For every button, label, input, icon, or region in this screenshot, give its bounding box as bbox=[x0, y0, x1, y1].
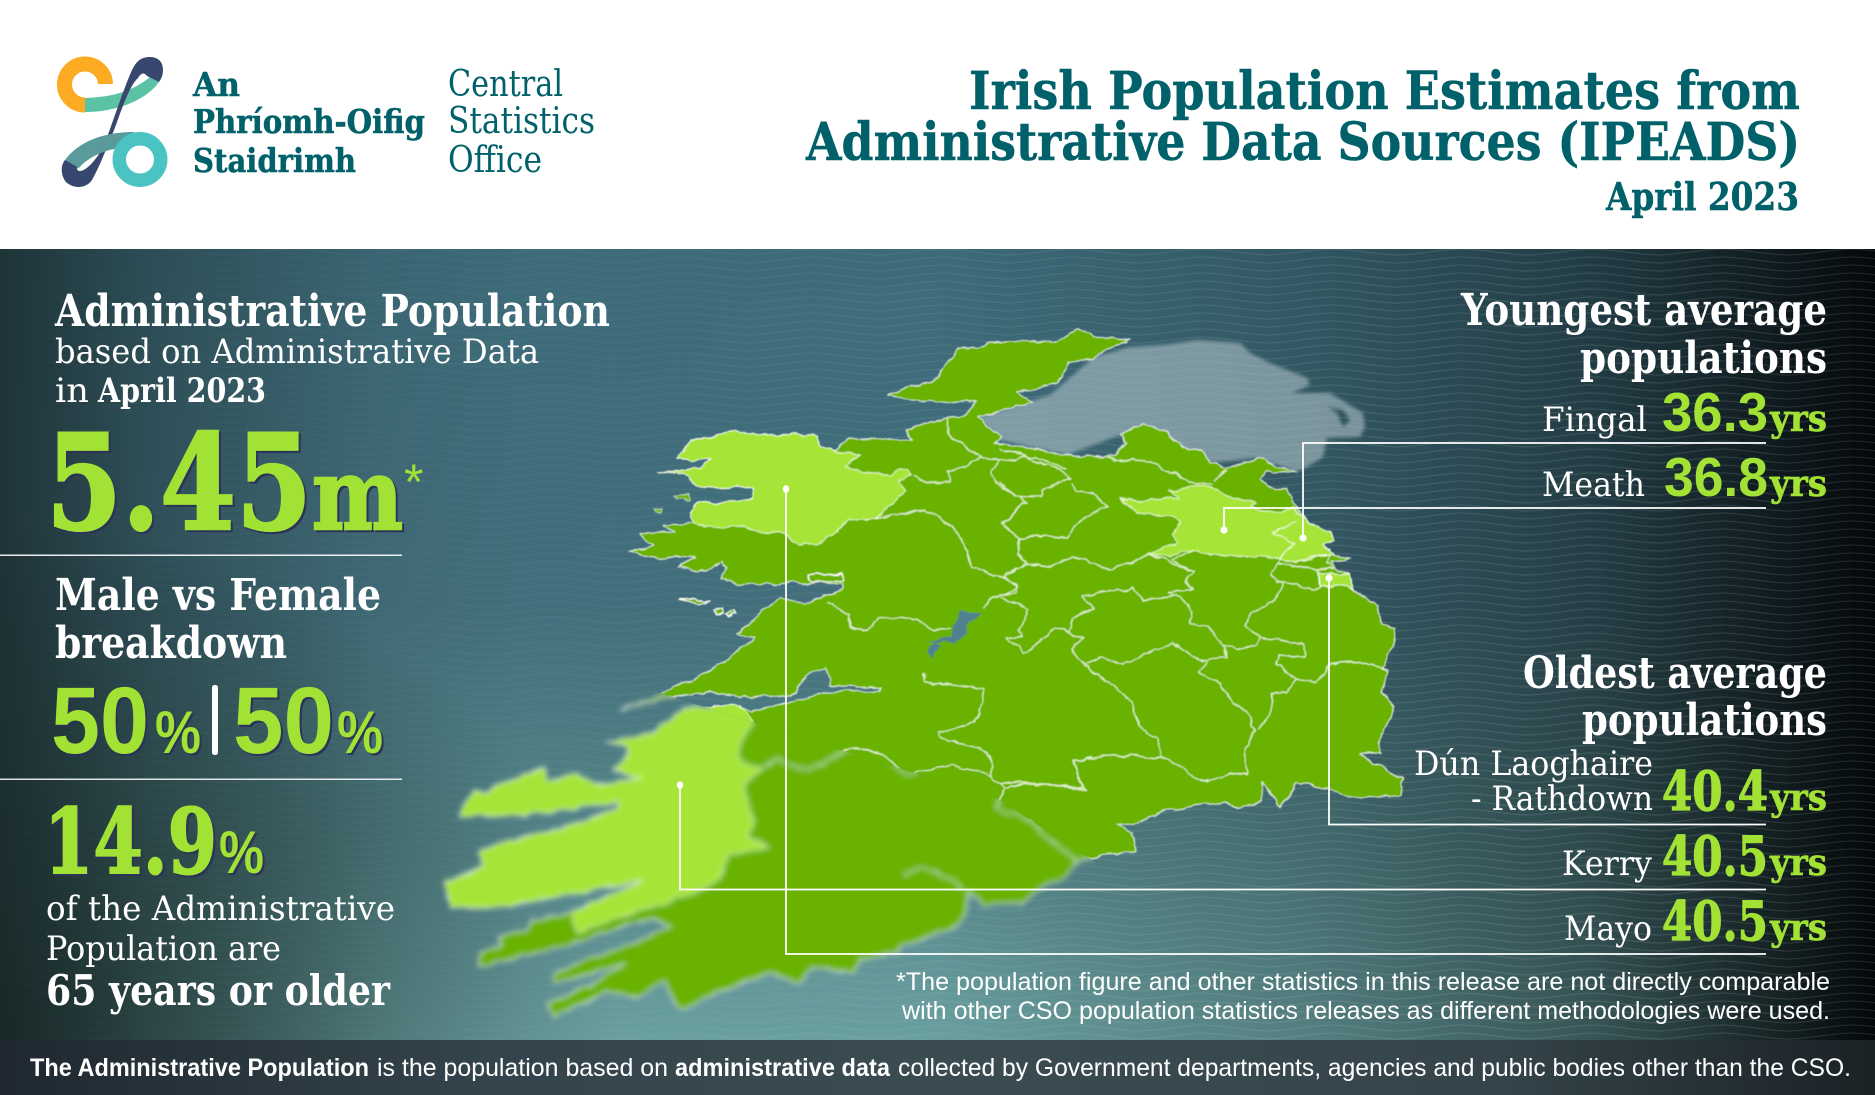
subheading bbox=[55, 332, 539, 411]
row: Mayo: 40.5 bbox=[1662, 889, 1768, 953]
description: Population are bbox=[46, 929, 281, 969]
row: Kerry: yrs bbox=[1769, 842, 1827, 884]
row: Dún Laoghaire-Rathdown bbox=[1414, 744, 1827, 823]
row: Mayo bbox=[1564, 889, 1827, 953]
percentages: 50 bbox=[51, 668, 149, 774]
logo text: English: Central bbox=[448, 64, 563, 105]
row: Meath: yrs bbox=[1769, 463, 1827, 505]
percentages bbox=[51, 668, 383, 774]
row: Meath: 36.8 bbox=[1664, 446, 1768, 508]
subheading: based on Administrative Data bbox=[55, 332, 539, 372]
subheading: in bbox=[55, 371, 89, 411]
footer definition text: collected by Government departments, agencies and public bodies other than the CSO. bbox=[898, 1054, 1851, 1082]
heading bbox=[1460, 285, 1827, 384]
heading: Male vs Female bbox=[55, 570, 381, 621]
panel: footer band background bbox=[0, 1040, 1875, 1095]
big number 5.45m: m bbox=[312, 438, 403, 553]
logo text: Irish bbox=[192, 65, 425, 180]
icon: CSO logo mark bbox=[62, 57, 163, 187]
row: Meath: Meath bbox=[1542, 465, 1645, 505]
logo text: Irish: An bbox=[192, 65, 240, 104]
row: Mayo: Mayo bbox=[1564, 909, 1652, 949]
panel: youngest populations bbox=[1460, 285, 1827, 508]
row: Fingal: Fingal bbox=[1542, 400, 1647, 440]
logo text: English: Office bbox=[448, 140, 542, 181]
title bbox=[805, 61, 1800, 219]
row: Kerry: 40.5 bbox=[1662, 824, 1768, 888]
heading: populations bbox=[1582, 695, 1827, 746]
row: Fingal: yrs bbox=[1769, 398, 1827, 440]
wave line texture bbox=[518, 249, 1875, 1040]
percentages: 50 bbox=[233, 668, 334, 774]
callout: Dún Laoghaire-Rathdown leader line bbox=[1325, 574, 1766, 824]
big number 14.9%: % bbox=[219, 819, 264, 886]
panel: male vs female bbox=[51, 570, 383, 774]
panel: oldest populations bbox=[1414, 648, 1827, 953]
footer definition text: The Administrative Population bbox=[30, 1054, 369, 1082]
callout: Mayo leader line bbox=[783, 485, 1766, 954]
map: Northern Ireland (greyed out) bbox=[978, 340, 1365, 472]
callout: Kerry leader line bbox=[677, 781, 1766, 890]
row: Dún Laoghaire-Rathdown: 40.4 bbox=[1662, 759, 1768, 823]
callout: Fingal leader line bbox=[1299, 443, 1766, 542]
panel: gradient map background bbox=[0, 249, 1875, 1040]
logo text: English: Statistics bbox=[448, 101, 595, 142]
footer definition text bbox=[30, 1054, 1851, 1082]
big number 14.9%: 14.9 bbox=[44, 789, 217, 895]
percentages: % bbox=[155, 699, 201, 766]
row: Dún Laoghaire-Rathdown: - Rathdown bbox=[1471, 779, 1653, 819]
footer definition text: is the population based on bbox=[377, 1054, 668, 1082]
separator bbox=[212, 685, 218, 755]
heading: breakdown bbox=[55, 618, 287, 669]
divider bbox=[0, 778, 402, 780]
divider bbox=[0, 554, 402, 556]
row: Meath bbox=[1542, 446, 1827, 508]
footnote: *The population figure and other statistics in this release are not directly comparable bbox=[896, 968, 1830, 996]
heading bbox=[55, 570, 381, 669]
row: Kerry: Kerry bbox=[1562, 844, 1653, 884]
map: Republic of Ireland counties bbox=[445, 330, 1402, 1017]
percentages: % bbox=[337, 699, 383, 766]
subheading: April 2023 bbox=[97, 371, 266, 411]
title: April 2023 bbox=[1605, 174, 1799, 219]
heading: populations bbox=[1580, 333, 1827, 384]
panel: 65 years or older bbox=[44, 789, 395, 1015]
description: 65 years or older bbox=[46, 966, 391, 1015]
logo text: Irish: Staidrimh bbox=[193, 141, 356, 180]
row: Dún Laoghaire-Rathdown: Dún Laoghaire bbox=[1414, 744, 1653, 784]
heading: Administrative Population bbox=[54, 286, 610, 337]
footnote: with other CSO population statistics releases as different methodologies were used. bbox=[901, 997, 1830, 1025]
footer definition text: administrative data bbox=[675, 1054, 891, 1082]
heading bbox=[1523, 648, 1827, 746]
logo text: English bbox=[448, 64, 595, 181]
footnote bbox=[896, 968, 1830, 1025]
row: Mayo: yrs bbox=[1769, 907, 1827, 949]
asterisk: * bbox=[404, 454, 423, 510]
panel: administrative population bbox=[46, 286, 610, 561]
row: Kerry bbox=[1562, 824, 1827, 888]
big number 5.45m: 5.45 bbox=[46, 406, 312, 561]
description: of the Administrative bbox=[46, 889, 395, 929]
row: Fingal: 36.3 bbox=[1662, 381, 1768, 443]
callout: Meath leader line bbox=[1220, 508, 1766, 534]
row: Fingal bbox=[1542, 381, 1827, 443]
logo text: Irish: Phríomh-Oifig bbox=[193, 102, 425, 141]
row: Dún Laoghaire-Rathdown: yrs bbox=[1769, 777, 1827, 819]
description bbox=[46, 889, 395, 1015]
